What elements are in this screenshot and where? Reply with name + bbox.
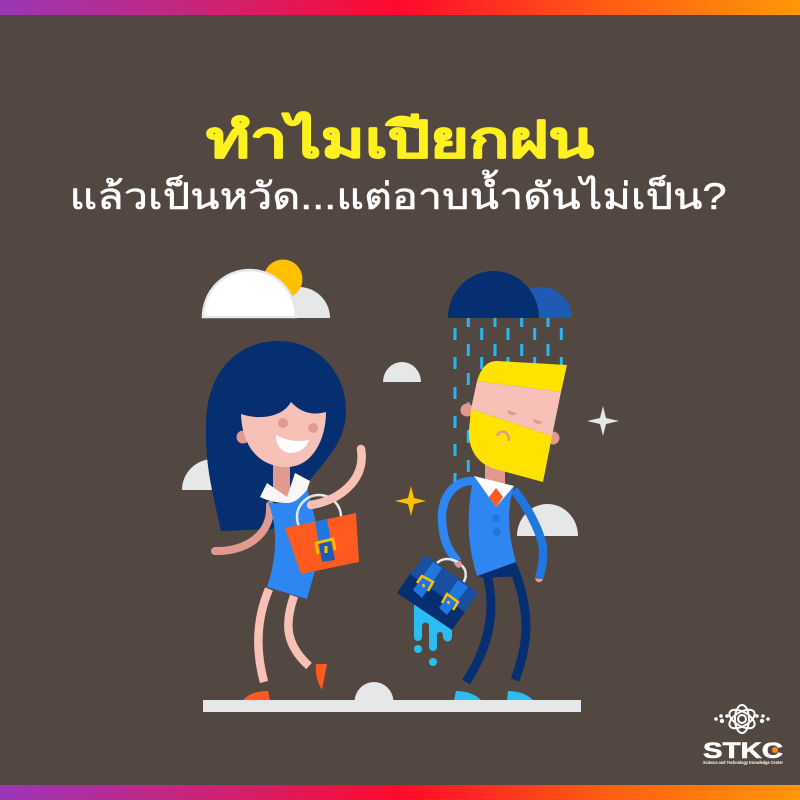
title: [70, 111, 726, 217]
case buckle 1: [417, 576, 433, 591]
left hand: [454, 561, 462, 568]
beard: [469, 409, 552, 482]
sun and cloud: [203, 260, 330, 318]
neck: [485, 462, 505, 486]
rain cloud: [448, 271, 572, 484]
icon: white sparkle: [587, 406, 619, 436]
right hand: [535, 578, 543, 582]
water drop 2: [429, 658, 437, 666]
title line 2: แล้วเป็นหวัด...แต่อาบน้ำดันไม่เป็น?: [70, 169, 726, 217]
shoe left: [454, 691, 481, 700]
hair: [477, 361, 567, 392]
logo tagline: Science and Technology Knowledge Center: [703, 760, 783, 765]
bag buckle pin: [324, 546, 328, 553]
ground bump: [354, 682, 394, 702]
shoe right: [316, 664, 327, 690]
bag strap lower: [319, 541, 335, 562]
logo orange dot: [772, 747, 778, 753]
ground bar: [203, 700, 581, 712]
case pins: [423, 584, 449, 604]
back arm: [215, 505, 270, 551]
icon: sun: [264, 260, 302, 298]
cloud behind girl: [182, 459, 244, 490]
briefcase handle: [437, 559, 466, 583]
water drop 1: [414, 645, 422, 653]
shirt collar: [474, 476, 514, 507]
briefcase: [397, 555, 478, 630]
icon: grey cloud: [268, 287, 330, 318]
rain drops: [455, 318, 561, 484]
hair: [206, 341, 346, 531]
ground: [203, 682, 581, 712]
shoe left: [243, 691, 270, 700]
handbag: [285, 513, 359, 574]
jacket: [469, 476, 516, 576]
man character: [397, 361, 567, 700]
navy cloud: [448, 271, 539, 318]
girl character: [206, 341, 362, 700]
STKC logo: [703, 705, 783, 765]
right arm: [514, 490, 543, 578]
ear: [236, 430, 250, 444]
face skin: [471, 381, 561, 436]
bag handle: [297, 495, 341, 539]
case buckle 2: [442, 594, 458, 610]
jacket buttons: [492, 514, 501, 536]
leg right: [288, 596, 309, 666]
bag buckle: [316, 539, 335, 554]
icon: white cloud: [203, 270, 296, 317]
left arm: [442, 481, 474, 562]
case lower: [397, 574, 465, 630]
mouth: [497, 432, 509, 441]
title line 1: ทำไมเปียกฝน: [206, 111, 594, 168]
eyes: [507, 410, 543, 424]
logo wordmark: STKC: [703, 738, 783, 763]
top gradient bar: [0, 0, 800, 15]
case upper: [410, 555, 478, 612]
case strap 1: [413, 562, 442, 598]
front arm: [311, 449, 362, 505]
shoe right: [507, 691, 533, 700]
dress: [267, 488, 322, 599]
bag strap: [315, 519, 331, 544]
cheek left: [278, 418, 288, 428]
smile: [276, 435, 309, 453]
bag body: [285, 513, 359, 574]
collar: [260, 473, 310, 503]
case strap 2: [439, 580, 468, 615]
cloud right of man: [517, 504, 578, 536]
blue cloud: [510, 287, 572, 318]
neck: [273, 462, 290, 498]
logo dots: [714, 714, 770, 723]
logo atom: [726, 705, 758, 733]
small cloud centre: [383, 362, 421, 382]
ears: [460, 404, 560, 444]
cheek right: [308, 423, 318, 433]
bottom gradient bar: [0, 785, 800, 800]
legs: [466, 566, 526, 682]
water drips: [414, 603, 452, 651]
face: [241, 402, 326, 467]
hips: [477, 562, 519, 578]
icon: gold sparkle: [395, 486, 426, 516]
leg left: [258, 589, 269, 682]
tie: [489, 488, 503, 507]
